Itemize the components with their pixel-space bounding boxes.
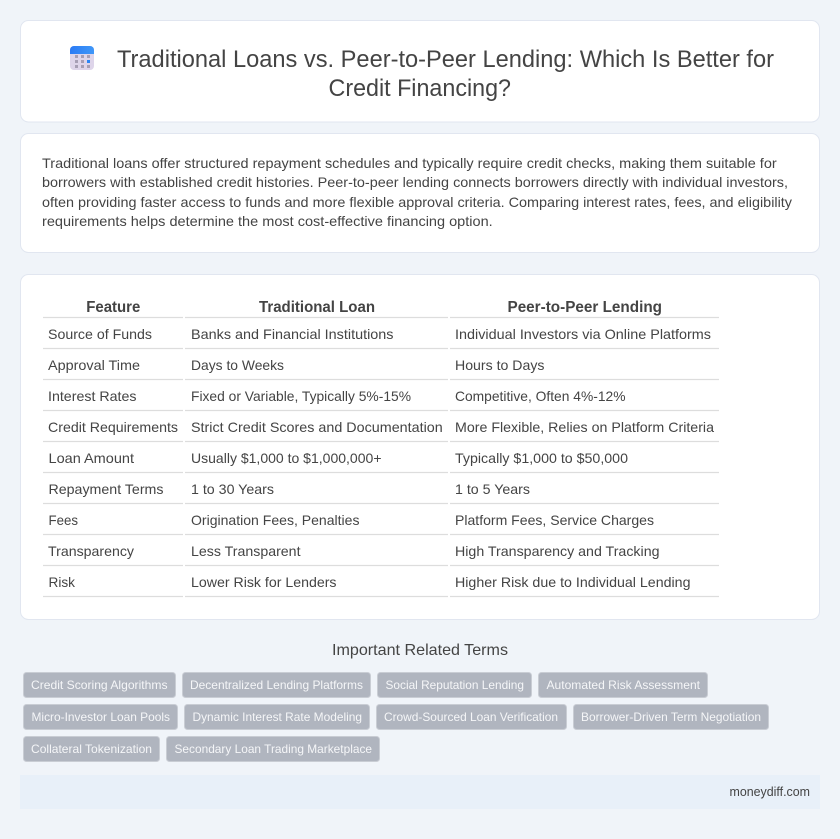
tag: Micro-Investor Loan Pools <box>32 710 170 724</box>
row: approval time: Days to Weeks <box>191 357 284 373</box>
tag <box>24 672 176 698</box>
tag <box>376 704 566 730</box>
tag <box>24 736 160 762</box>
row: loan amount <box>48 450 628 466</box>
row: repayment terms: Repayment Terms <box>48 481 164 497</box>
title <box>117 46 774 102</box>
tag: Crowd-Sourced Loan Verification <box>384 710 558 724</box>
tag: Dynamic Interest Rate Modeling <box>192 710 362 724</box>
row: source of funds <box>48 326 711 342</box>
footer <box>20 775 820 809</box>
tag <box>538 672 708 698</box>
table header: Feature <box>86 299 140 316</box>
row: repayment terms: 1 to 5 Years <box>455 481 530 497</box>
panel: related term tags <box>24 672 768 762</box>
row: risk: Risk <box>48 574 76 590</box>
row: approval time: Hours to Days <box>455 357 544 373</box>
text block: summary paragraph: requirements helps determine the most cost-effective financing option. <box>42 213 493 229</box>
tag <box>184 704 370 730</box>
tag <box>182 672 370 698</box>
table header <box>86 299 662 316</box>
row: fees: Platform Fees, Service Charges <box>455 512 654 528</box>
row: risk: Higher Risk due to Individual Lending <box>455 574 690 590</box>
table header: Peer-to-Peer Lending <box>508 299 662 316</box>
row: interest rates: Fixed or Variable, Typically 5%-15% <box>191 388 411 404</box>
title: Traditional Loans vs. Peer-to-Peer Lending: Which Is Better for <box>117 46 774 73</box>
row: source of funds: Individual Investors via Online Platforms <box>455 326 711 342</box>
row: credit requirements: More Flexible, Relies on Platform Criteria <box>455 419 714 435</box>
tag: Secondary Loan Trading Marketplace <box>174 742 372 756</box>
tag <box>166 736 380 762</box>
tag: Collateral Tokenization <box>31 742 152 756</box>
row: credit requirements <box>48 419 714 435</box>
row: repayment terms: 1 to 30 Years <box>191 481 274 497</box>
text block: summary paragraph: borrowers with established credit histories. Peer-to-peer lending connects borrowers directly with individual investors, <box>42 174 788 190</box>
row: risk: Lower Risk for Lenders <box>191 574 336 590</box>
tag <box>574 704 768 730</box>
row: fees: Fees <box>48 512 78 528</box>
text block: summary paragraph: Traditional loans offer structured repayment schedules and typically require credit checks, making them suitable for <box>42 155 777 171</box>
tag: Social Reputation Lending <box>386 678 524 692</box>
row: credit requirements: Strict Credit Scores and Documentation <box>191 419 443 435</box>
row: fees: Origination Fees, Penalties <box>191 512 360 528</box>
table header: Traditional Loan <box>259 299 375 316</box>
row: transparency <box>48 543 660 559</box>
row: transparency: High Transparency and Tracking <box>455 543 660 559</box>
panel: introduction <box>20 134 820 252</box>
row: approval time <box>48 357 544 373</box>
tag <box>378 672 532 698</box>
row: loan amount: Typically $1,000 to $50,000 <box>455 450 628 466</box>
tag: Automated Risk Assessment <box>546 678 701 692</box>
text block: summary paragraph <box>42 155 792 229</box>
title: Credit Financing? <box>328 75 511 102</box>
row: credit requirements: Credit Requirements <box>48 419 178 435</box>
footer: moneydiff.com <box>730 785 810 799</box>
row: loan amount: Usually $1,000 to $1,000,000+ <box>191 450 382 466</box>
row: interest rates <box>48 388 626 404</box>
tag <box>24 704 178 730</box>
panel: title card <box>20 20 820 122</box>
icon: calendar <box>70 46 94 70</box>
row: source of funds: Source of Funds <box>48 326 152 342</box>
row: transparency: Transparency <box>48 543 134 559</box>
row: risk <box>48 574 690 590</box>
tag: Credit Scoring Algorithms <box>31 678 168 692</box>
tag: Borrower-Driven Term Negotiation <box>581 710 761 724</box>
tag: Decentralized Lending Platforms <box>190 678 363 692</box>
row: interest rates: Interest Rates <box>48 388 136 404</box>
heading: important related terms: Important Related Terms <box>332 642 508 659</box>
row: source of funds: Banks and Financial Institutions <box>191 326 394 342</box>
row: fees <box>48 512 654 528</box>
row: repayment terms <box>48 481 530 497</box>
panel: comparison table <box>20 274 820 620</box>
row: interest rates: Competitive, Often 4%-12% <box>455 388 626 404</box>
row: approval time: Approval Time <box>48 357 140 373</box>
row: loan amount: Loan Amount <box>48 450 134 466</box>
row: transparency: Less Transparent <box>191 543 301 559</box>
text block: summary paragraph: often providing faster access to funds and more flexible approval criteria. Comparing interest rates, fees, and eligibility <box>42 194 792 210</box>
